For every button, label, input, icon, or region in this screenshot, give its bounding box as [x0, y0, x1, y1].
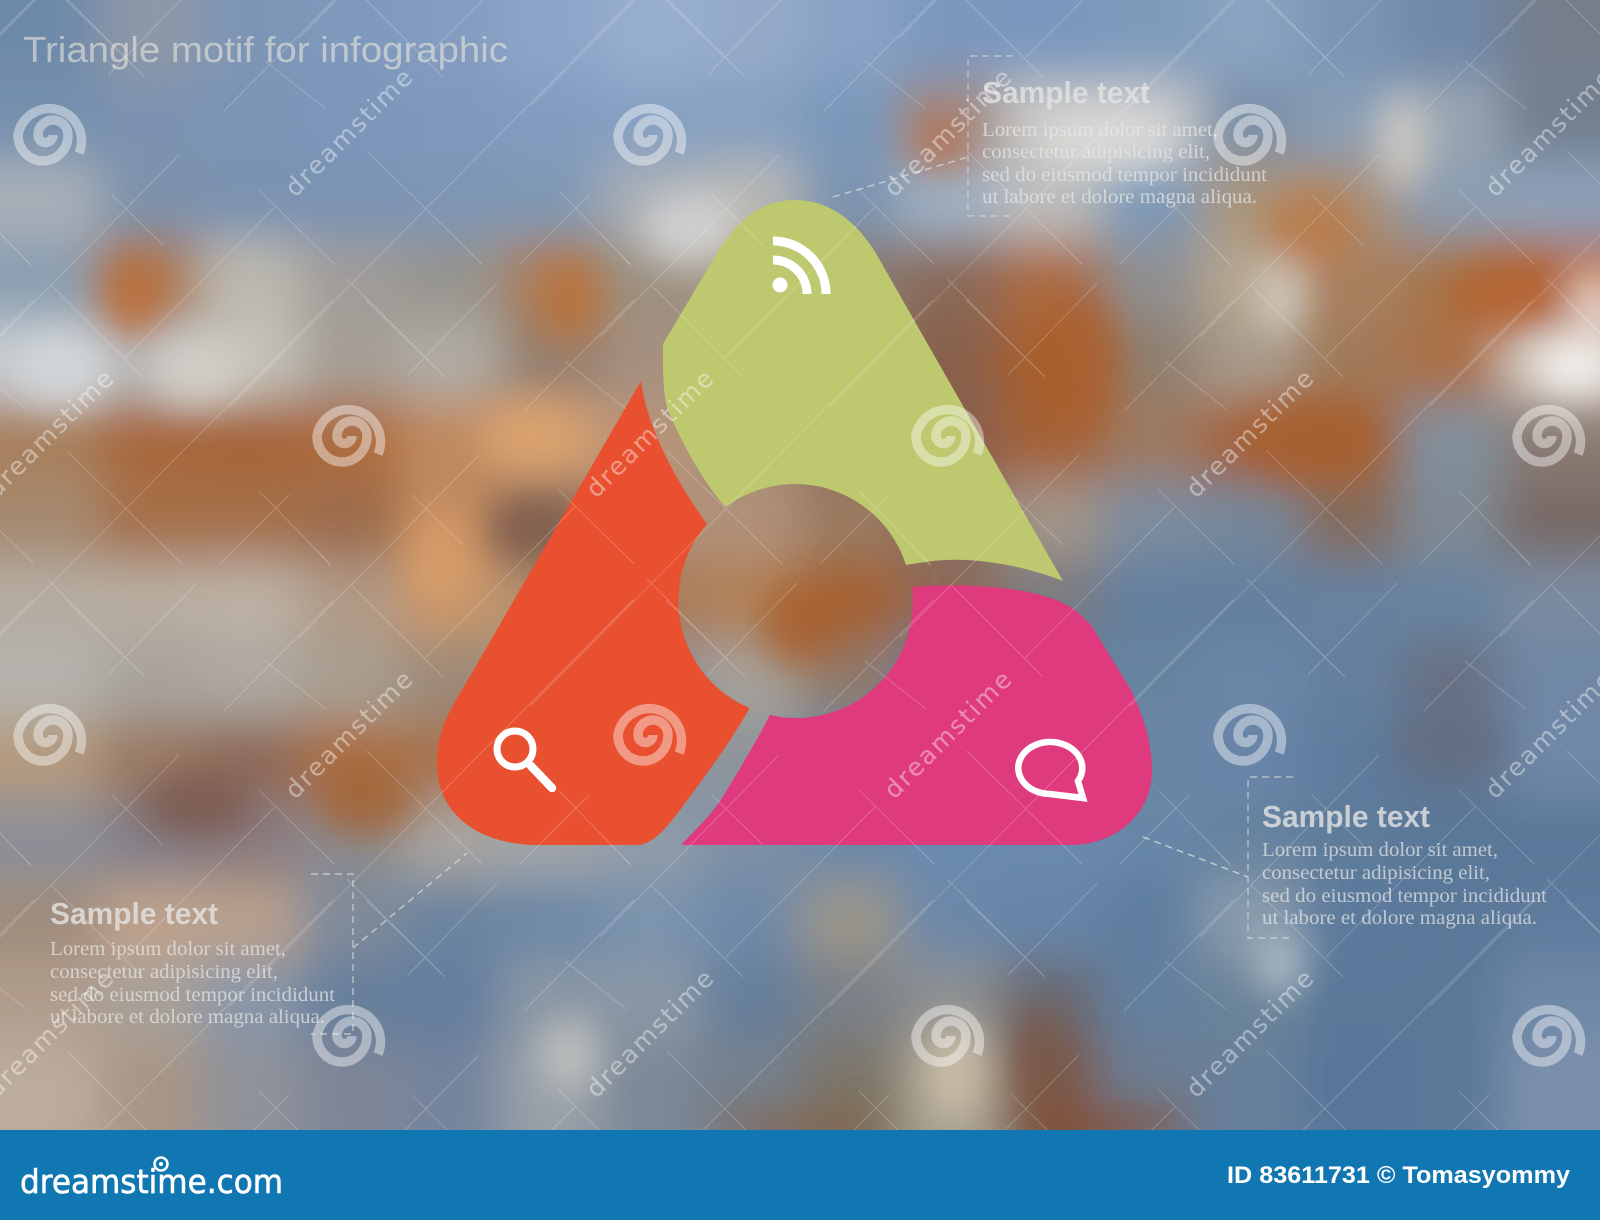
- callout: left sample text: sed do eiusmod tempor incididunt: [50, 984, 335, 1006]
- triangle segment: red (left): [437, 381, 750, 845]
- watermark words: dreamstime: [1180, 964, 1319, 1103]
- triangle segment: pink (right): [681, 585, 1152, 845]
- callout: top sample text: sed do eiusmod tempor incididunt: [982, 164, 1267, 186]
- watermark words: dreamstime: [878, 665, 1017, 804]
- watermark words: dreamstime: [279, 63, 418, 202]
- callout: right sample text: sed do eiusmod tempor incididunt: [1262, 885, 1547, 907]
- callout: right sample text: Lorem ipsum dolor sit amet,: [1262, 839, 1498, 861]
- callout: top sample text: consectetur adipisicing elit,: [982, 141, 1210, 163]
- callout: top sample text: ut labore et dolore magna aliqua.: [982, 186, 1257, 208]
- callout: right sample text: consectetur adipisicing elit,: [1262, 862, 1490, 884]
- callout: left sample text: Sample text: [50, 896, 218, 931]
- icon: magnifier: [497, 731, 552, 788]
- callout: top sample text: [833, 56, 1267, 216]
- watermark spirals: [18, 109, 1581, 1062]
- watermark words: dreamstime: [878, 63, 1017, 202]
- callout: left sample text: ut labore et dolore magna aliqua.: [50, 1006, 325, 1028]
- callout: right sample text: ut labore et dolore magna aliqua.: [1262, 907, 1537, 929]
- heading: Triangle motif for infographic: Triangle motif for infographic: [23, 29, 508, 70]
- callout: left sample text: Lorem ipsum dolor sit amet,: [50, 938, 286, 960]
- callout: top sample text: Lorem ipsum dolor sit amet,: [982, 119, 1218, 141]
- footer bar: [0, 1130, 1600, 1220]
- watermark words: dreamstime: [1180, 364, 1319, 503]
- watermark words: dreamstime: [580, 364, 719, 503]
- icon: speech bubble: [1018, 742, 1083, 798]
- footer credit: ID 83611731 © Tomasyommy: [1227, 1162, 1571, 1189]
- callout: left sample text: consectetur adipisicing elit,: [50, 961, 278, 983]
- callout: right sample text: [1143, 777, 1547, 938]
- callout: right sample text: Sample text: [1262, 799, 1430, 834]
- callout: left sample text: [50, 853, 467, 1034]
- footer logo: dreamstime.com: [20, 1162, 283, 1201]
- triangle segment: green (top): [663, 200, 1063, 581]
- watermark words: dreamstime: [279, 665, 418, 804]
- icon: wifi signal: [772, 241, 826, 294]
- watermark words: dreamstime: [580, 964, 719, 1103]
- callout: top sample text: Sample text: [982, 75, 1150, 110]
